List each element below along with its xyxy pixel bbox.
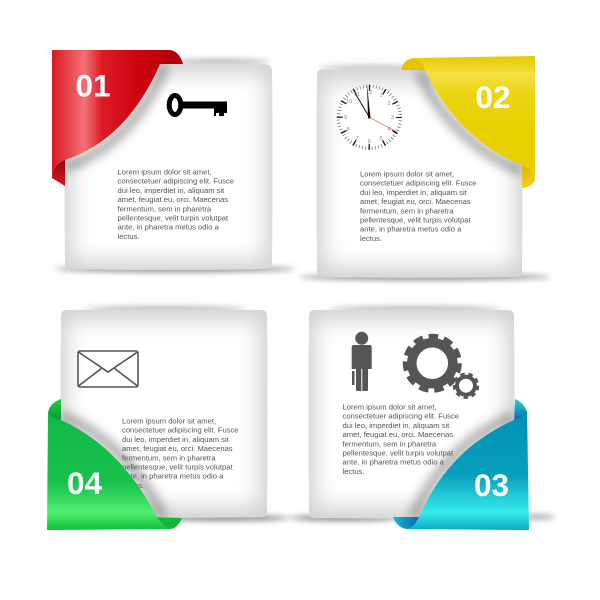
- text block 01: pellentesque, velit turpis volutpat: [118, 214, 229, 222]
- number 03: 03: [474, 467, 509, 503]
- paper shadows: [290, 306, 555, 521]
- text block 04: lectus.: [122, 481, 144, 490]
- icon: large gear: [405, 336, 459, 390]
- number 01: 01: [76, 68, 111, 104]
- ribbon 01: [52, 50, 183, 186]
- icon: clock: 6: [368, 139, 371, 145]
- text block 04: dui leo, imperdiet in, aliquam sit: [122, 435, 230, 444]
- text block 01: dui leo, imperdiet in, aliquam sit: [118, 186, 225, 195]
- text block 02: amet, feugiat eu, orci. Maecenas: [360, 197, 471, 206]
- icon: person: [352, 332, 372, 391]
- paper sheet: [60, 60, 276, 274]
- paper shadows: [300, 65, 550, 280]
- panel: card 01: [52, 50, 295, 274]
- number 04: 04: [67, 465, 103, 501]
- icon: clock: 10: [346, 99, 352, 105]
- icon: clock: 9: [344, 115, 347, 121]
- icon: clock: 8: [346, 127, 350, 133]
- text block 01: Lorem ipsum dolor sit amet,: [118, 168, 212, 176]
- text block 04: ante, in pharetra metus odio a: [122, 472, 224, 481]
- panel: card 02: [300, 56, 550, 281]
- curl shadow 04: [61, 416, 163, 517]
- icon: clock: 4: [387, 127, 391, 133]
- text block 03: Lorem ipsum dolor sit amet,: [342, 402, 437, 412]
- number 02: 02: [476, 79, 511, 115]
- icon: clock: 1: [379, 93, 383, 99]
- paper shadows: [85, 306, 290, 521]
- icon: envelope: [78, 351, 138, 387]
- text block 01: fermentum, sem in pharetra: [118, 204, 212, 213]
- ribbon 02: [401, 56, 535, 188]
- icon: small gear: [454, 374, 478, 398]
- icon: clock: 3: [391, 115, 394, 121]
- icon: clock: 2: [387, 101, 391, 107]
- text block 03: pellentesque, velit turpis volutpat: [342, 448, 454, 458]
- text block 04: consectetuer adipiscing elit. Fusce: [122, 426, 239, 435]
- text block 01: amet, feugiat eu, orci. Maecenas: [118, 195, 228, 204]
- text block 03: ante, in pharetra metus odio a: [342, 458, 445, 467]
- ribbon 03: [393, 399, 529, 530]
- text block 02: consectetuer adipiscing elit. Fusce: [360, 179, 477, 188]
- curl shadow 03: [413, 416, 514, 517]
- paper shadows: [55, 59, 295, 272]
- text block 02: lectus.: [360, 234, 382, 243]
- panel: card 03: [290, 305, 555, 530]
- text block 01: lectus.: [118, 232, 140, 241]
- text block 02: dui leo, imperdiet in, aliquam sit: [360, 188, 468, 197]
- icon: clock: 7: [355, 136, 359, 142]
- text block 02: fermentum, sem in pharetra: [360, 206, 454, 215]
- icon: clock: 12: [366, 90, 372, 96]
- paper sheet: [312, 65, 527, 281]
- text block 04: pellentesque, velit turpis volutpat: [122, 462, 234, 472]
- text block 01: ante, in pharetra metus odio a: [118, 223, 220, 232]
- text block 03: amet, feugiat eu, orci. Maecenas: [342, 430, 453, 439]
- text block 01: consectetuer adipiscing elit. Fusce: [118, 177, 234, 186]
- text block 04: fermentum, sem in pharetra: [122, 453, 216, 462]
- text block 03: fermentum, sem in pharetra: [342, 439, 437, 448]
- text block 02: pellentesque, velit turpis volutpat: [360, 216, 472, 224]
- text block 04: amet, feugiat eu, orci. Maecenas: [122, 444, 233, 453]
- panel: card 04: [47, 305, 290, 530]
- text block 02: ante, in pharetra metus odio a: [360, 225, 462, 234]
- paper sheet: [56, 305, 272, 521]
- icon: key: [169, 96, 227, 116]
- icon: clock: 11: [354, 92, 360, 98]
- ribbon 04: [47, 399, 182, 530]
- text block 03: consectetuer adipiscing elit. Fusce: [342, 412, 459, 421]
- text block 03: lectus.: [342, 467, 365, 476]
- icon: clock: [336, 84, 402, 150]
- text block 02: Lorem ipsum dolor sit amet,: [360, 170, 454, 178]
- text block 04: Lorem ipsum dolor sit amet,: [122, 416, 216, 426]
- paper sheet: [304, 305, 519, 523]
- icon: clock: 5: [379, 136, 383, 142]
- text block 03: dui leo, imperdiet in, aliquam sit: [342, 421, 450, 430]
